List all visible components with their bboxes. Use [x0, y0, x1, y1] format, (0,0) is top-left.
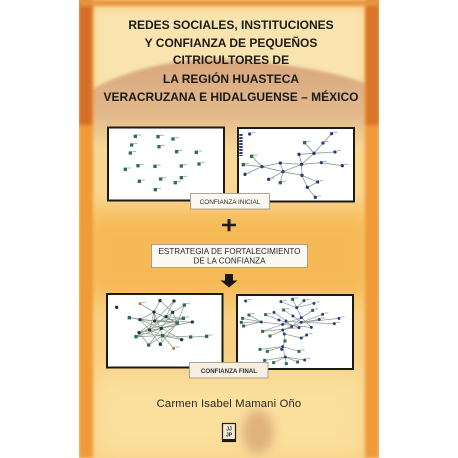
- box: strengthening strategy: DE LA CONFIANZA: [194, 256, 266, 266]
- label: initial trust: CONFIANZA INICIAL: [200, 199, 261, 206]
- network graph: initial: [241, 132, 348, 197]
- network graph: final expanded: [241, 298, 345, 364]
- title: REDES SOCIALES, INSTITUCIONES: [128, 18, 334, 32]
- network graph: final dense: [117, 301, 212, 348]
- icon: publisher logo: JJ: [226, 426, 232, 432]
- box: strengthening strategy: ESTRATEGIA DE FORTALECIMIENTO: [159, 247, 300, 256]
- title: LA REGIÓN HUASTECA: [163, 71, 299, 86]
- label: initial trust: [190, 194, 270, 209]
- label: final trust: [190, 362, 268, 378]
- box: strengthening strategy: [152, 244, 308, 268]
- panel: final trust, expanded network: [237, 295, 353, 369]
- icon: down arrow: [220, 274, 238, 288]
- title: Y CONFIANZA DE PEQUEÑOS: [145, 35, 317, 50]
- panel: initial trust, sparse network: [238, 128, 354, 202]
- panel: initial trust, isolated actors: [108, 128, 224, 200]
- label: final trust: CONFIANZA FINAL: [201, 368, 257, 375]
- nodes: isolated green actors: [125, 135, 205, 190]
- icon: plus: [222, 219, 236, 231]
- title: CITRICULTORES DE: [173, 53, 289, 67]
- title: VERACRUZANA E HIDALGUENSE – MÉXICO: [104, 89, 358, 104]
- panel: final trust, dense network: [107, 294, 222, 368]
- cover background: [79, 0, 379, 458]
- author: Carmen Isabel Mamani Oño: [157, 398, 301, 410]
- icon: publisher logo: [222, 424, 236, 442]
- icon: publisher logo: JP: [226, 432, 233, 438]
